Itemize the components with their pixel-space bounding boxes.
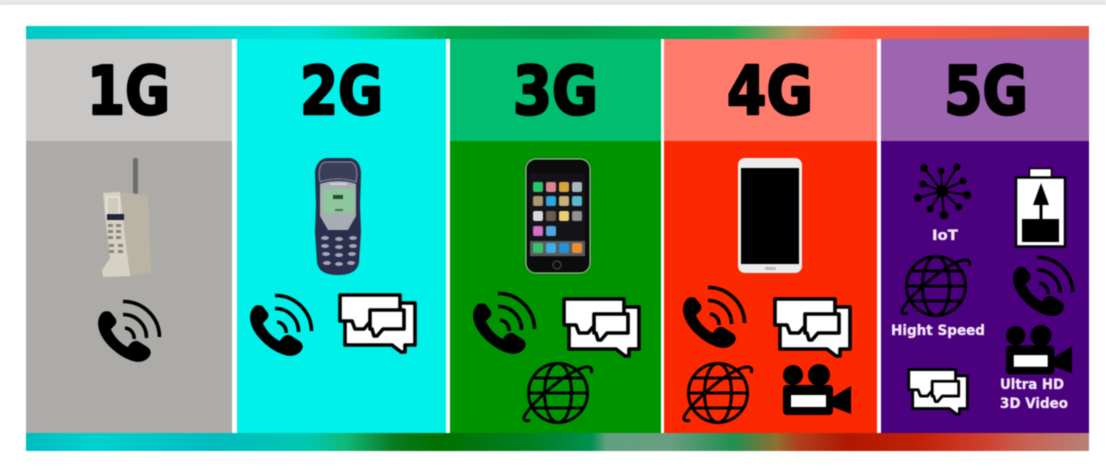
- icon: chat: [564, 299, 639, 356]
- panel: 5G: [881, 39, 1089, 433]
- panel: 3G: [450, 39, 661, 433]
- 4G header background: [664, 39, 877, 141]
- heading: 4G: 4G: [727, 52, 813, 130]
- icon: globe: [902, 256, 970, 316]
- label: Ultra HD: Ultra HD: [1000, 377, 1064, 393]
- icon: video camera: [1006, 325, 1072, 374]
- label: Hight Speed: Hight Speed: [891, 323, 985, 339]
- icon: call: [99, 301, 160, 361]
- icon: battery: [1016, 168, 1065, 246]
- icon: globe: [684, 364, 752, 422]
- panel: 1G: [26, 39, 232, 433]
- bottom gradient strip: [26, 433, 1089, 451]
- icon: call: [474, 293, 534, 353]
- 1G body background: [26, 141, 232, 433]
- panel: 4G: [664, 39, 877, 433]
- top gradient strip: [26, 26, 1089, 39]
- heading: 1G: 1G: [87, 52, 170, 130]
- icon: call: [684, 287, 744, 347]
- icon: touchscreen phone: [738, 158, 802, 273]
- icon: call: [251, 295, 312, 355]
- heading: 3G: 3G: [513, 52, 598, 130]
- 5G header background: [881, 39, 1089, 141]
- icon: chat: [775, 299, 850, 356]
- label: 3D Video: 3D Video: [1000, 396, 1068, 412]
- label: IoT: IoT: [932, 228, 958, 244]
- icon: call: [1014, 257, 1073, 315]
- icon: chat: [340, 295, 415, 352]
- icon: keypad phone: [315, 158, 361, 275]
- panel: 2G: [237, 39, 446, 433]
- icon: IoT network: [915, 164, 970, 218]
- 3G body background: [450, 141, 661, 433]
- 2G background: [237, 39, 446, 433]
- icon: globe: [524, 364, 592, 422]
- heading: 5G: 5G: [944, 52, 1028, 130]
- heading: 2G: 2G: [300, 52, 383, 130]
- icon: brick phone: [102, 158, 151, 277]
- 4G body background: [664, 141, 877, 433]
- 5G body background: [881, 141, 1089, 433]
- 3G header background: [450, 39, 661, 141]
- 1G header background: [26, 39, 232, 141]
- icon: smartphone with apps: [526, 159, 590, 273]
- icon: chat: [909, 370, 967, 414]
- icon: video camera: [783, 364, 851, 415]
- top grey band: [0, 0, 1106, 5]
